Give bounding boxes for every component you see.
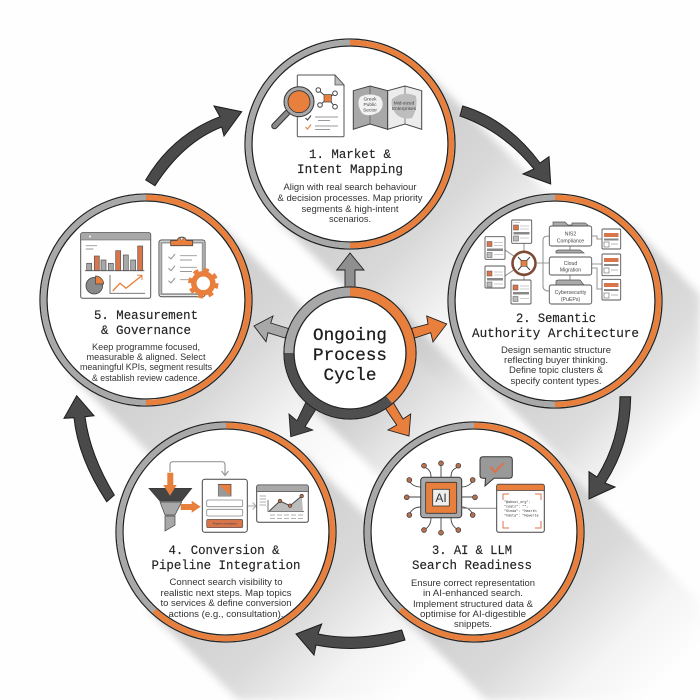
icon: structured data window: "@about_org": [504, 500, 530, 505]
description 3: Ensure correct representation [411, 578, 535, 588]
icon: KPI dashboard [81, 233, 151, 298]
icon: structured data window: "kmota": "Hewerta [504, 514, 539, 518]
panel: step 4 conversion and pipeline integration [116, 422, 336, 642]
panel: centre hub [254, 253, 447, 437]
icon: folded segment map: Mid-sized [394, 100, 415, 106]
topic folders: Compliance [557, 238, 584, 244]
heading 1: Intent Mapping [297, 162, 403, 177]
icon: AI chip with circuit nodes: AI [435, 491, 447, 505]
description 1: segments & high-intent [302, 204, 399, 214]
heading 4: Pipeline Integration [152, 558, 300, 573]
icon: analytics window [257, 485, 308, 522]
description 4: Connect search visibility to [170, 577, 282, 587]
icon: topic cluster architecture [485, 220, 621, 304]
description 2: specify content types. [510, 376, 602, 386]
topic folders: Cybersecurity [555, 290, 587, 296]
ring 5 [40, 194, 252, 406]
hub node [512, 252, 536, 275]
description 1: & decision processes. Map priority [278, 193, 423, 203]
arrow: step 3 to step 4 [296, 624, 405, 655]
description 1 [278, 182, 423, 224]
arrow: step 1 to step 2 [460, 106, 551, 184]
description 2: Define topic clusters & [509, 365, 603, 375]
description 1: scenarios. [329, 214, 371, 224]
arrow: hub to step 4 [289, 398, 317, 437]
icon: structured data window [462, 484, 544, 532]
icon: lead form [202, 479, 256, 532]
hub title: Cycle [324, 366, 376, 386]
topic folders [549, 222, 592, 304]
description 4: actions (e.g., consultation). [168, 609, 284, 619]
hub title: Process [313, 346, 387, 366]
content cards around hub [485, 220, 532, 304]
description 2: reflecting buyer thinking. [504, 355, 608, 365]
description 3 [411, 578, 535, 629]
heading 3 [412, 543, 532, 573]
arrow: step 5 to step 1 [146, 106, 242, 186]
hub title: Ongoing [313, 326, 387, 346]
panel: step 1 market and intent mapping [245, 39, 455, 249]
arrow: hub to step 5 [254, 316, 290, 342]
heading 5 [94, 308, 198, 338]
panel: step 3 AI and LLM search readiness [364, 422, 584, 642]
ring 4 [116, 422, 336, 642]
description 1: Align with real search behaviour [284, 182, 416, 192]
icon: structured data window: "Steda": "Hearth [504, 509, 537, 514]
heading 2: Authority Architecture [472, 326, 639, 341]
icon: folded segment map: Enterprises [392, 106, 417, 112]
description 4: realistic next steps. Map topics [160, 588, 292, 598]
description 2: Design semantic structure [501, 345, 611, 355]
heading 1: 1. Market & [309, 147, 391, 162]
heading 1 [297, 147, 403, 177]
heading 5: & Governance [101, 323, 191, 338]
panel: step 2 semantic authority architecture [448, 194, 662, 408]
description 5: Keep programme focused, [92, 342, 200, 352]
arrow: hub to step 2 [406, 316, 447, 342]
description 5: & establish review cadence. [92, 373, 200, 383]
hub ring [284, 287, 416, 419]
icon: structured data window: "ceats": "", [504, 504, 528, 510]
description 4 [160, 577, 292, 619]
panel: step 5 measurement and governance [40, 194, 252, 406]
icon: folded segment map: Public [363, 102, 377, 108]
description 5: measurable & aligned. Select [86, 352, 206, 362]
topic folders: (PuEPs) [561, 297, 580, 303]
icon: conversion funnel [149, 462, 228, 531]
arrow: hub to step 1 [337, 253, 364, 290]
description 3: in AI-enhanced search. [423, 588, 523, 598]
description 3: optimise for AI-digestible [420, 609, 526, 619]
ring 2 [448, 194, 662, 408]
detail pages [602, 229, 621, 300]
icon: clipboard checklist with gear [159, 237, 216, 297]
icon: folded segment map: Greek [363, 96, 377, 102]
topic folders: Cloud [564, 261, 577, 267]
heading 5: 5. Measurement [94, 308, 198, 323]
ring 3 [364, 422, 584, 642]
arrow: step 4 to step 5 [64, 396, 114, 502]
heading 4: 4. Conversion & [168, 543, 280, 558]
arrow: hub to step 3 [382, 397, 411, 436]
icon: AI chip with circuit nodes [404, 461, 477, 535]
heading 2: 2. Semantic [516, 311, 596, 326]
icon: folded segment map: Sector [363, 108, 377, 114]
ring 1 [245, 39, 455, 249]
heading 3: Search Readiness [412, 558, 532, 573]
description 5 [80, 342, 212, 383]
topic folders: Migration [560, 268, 581, 274]
description 4: to services & define conversion [160, 598, 292, 608]
icon: speech bubble with check [480, 457, 512, 486]
icon: document with magnifier and network [274, 75, 344, 137]
arrow: step 2 to step 3 [589, 397, 631, 499]
heading 2 [472, 311, 639, 341]
description 3: Implement structured data & [413, 599, 533, 609]
icon: lead form: Request consultation [213, 522, 237, 526]
description 5: meaningful KPIs, segment results [80, 362, 212, 372]
hub title [313, 326, 387, 386]
heading 3: 3. AI & LLM [432, 543, 512, 558]
heading 4 [152, 543, 300, 573]
topic folders: NIS2 [565, 232, 576, 238]
description 3: snippets. [454, 619, 492, 629]
description 2 [501, 345, 611, 386]
icon: folded segment map [353, 86, 422, 129]
